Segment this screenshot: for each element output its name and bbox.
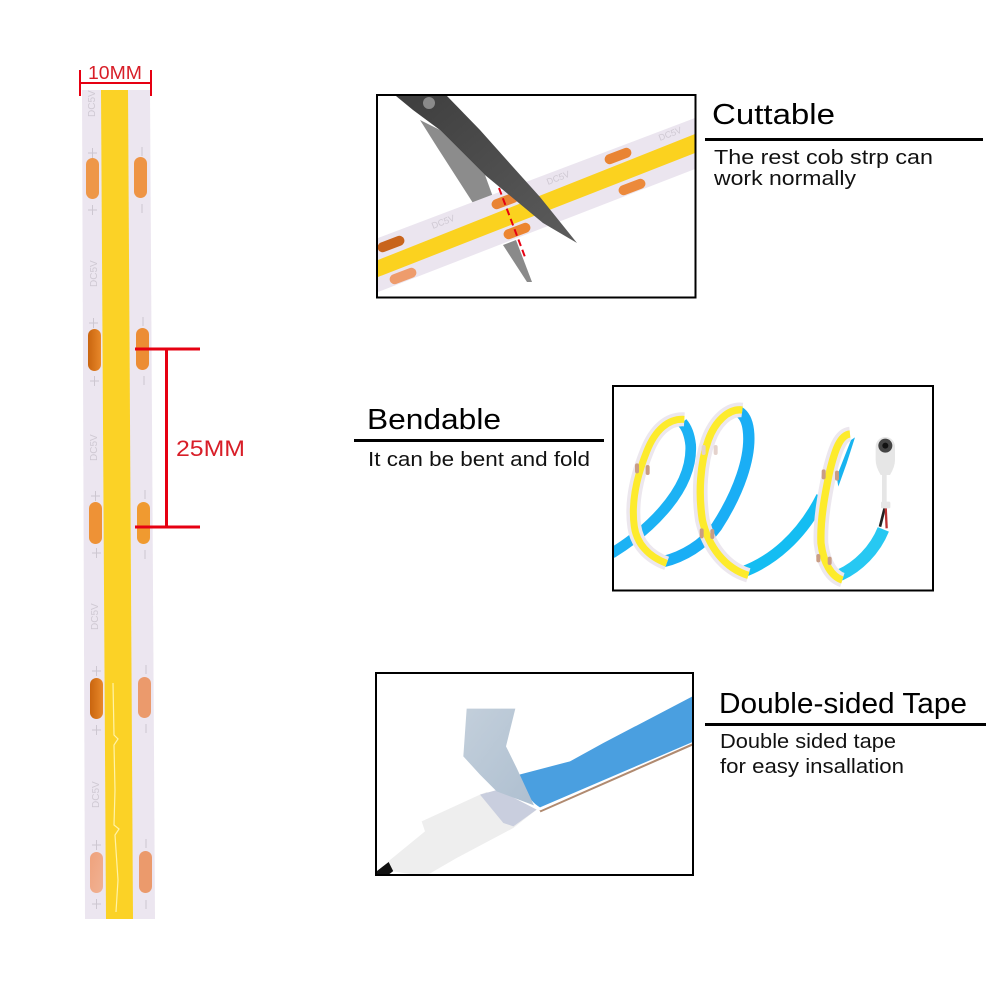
wires	[880, 507, 887, 528]
text: cuttable description	[713, 146, 933, 190]
text: tape description: for easy insallation	[720, 755, 904, 778]
polarity marks	[88, 147, 146, 909]
strip edge	[540, 744, 693, 811]
LED strip photo (vertical)	[82, 90, 155, 919]
scissor tip	[503, 240, 532, 282]
cut line	[499, 188, 525, 257]
solder pads	[86, 157, 152, 893]
strip	[378, 118, 695, 292]
heading: Bendable: Bendable	[367, 404, 501, 436]
DC5V print: DC5V	[430, 213, 456, 231]
screw	[423, 97, 435, 109]
heading: Cuttable	[705, 99, 983, 141]
text: cuttable description: work normally	[713, 167, 857, 190]
peeled liner	[463, 709, 534, 805]
heading: Bendable	[354, 404, 604, 442]
DC5V print: DC5V	[657, 125, 683, 143]
blue tape	[519, 696, 693, 807]
frame	[376, 673, 693, 875]
dimension: 25MM	[135, 349, 245, 527]
text: tape description	[720, 730, 904, 778]
frame	[613, 386, 933, 590]
DC5V print	[430, 125, 683, 231]
heat-shrink sleeve	[388, 792, 537, 876]
DC5V print: DC5V	[545, 169, 571, 187]
pads	[376, 146, 647, 286]
connector	[876, 437, 895, 508]
blue backing	[612, 412, 883, 575]
DC5V print: DC5V	[91, 781, 102, 808]
yellow COB line	[378, 134, 695, 277]
DC5V print: DC5V	[89, 434, 100, 461]
crack highlight in phosphor	[113, 683, 119, 912]
heading: Cuttable: Cuttable	[712, 99, 835, 131]
panel: cuttable photo	[376, 95, 696, 298]
text: tape description: Double sided tape	[720, 730, 896, 753]
dimension: 10MM	[80, 63, 151, 96]
upper scissor blade	[396, 96, 577, 243]
loop two	[700, 410, 748, 575]
dimension: 10MM: 10MM	[88, 63, 142, 83]
DC5V print	[87, 90, 102, 808]
panel: bendable photo	[612, 386, 933, 590]
strip board	[82, 90, 155, 919]
text: cuttable description: The rest cob strp can	[714, 146, 933, 169]
text: bendable description: It can be bent and fold	[368, 449, 590, 471]
black cable	[378, 865, 393, 876]
heading: Double-sided Tape: Double-sided Tape	[719, 688, 967, 720]
loop one	[633, 419, 684, 563]
pads	[635, 445, 839, 565]
lower scissor blade	[420, 120, 493, 203]
DC5V print: DC5V	[87, 90, 98, 117]
DC5V print: DC5V	[90, 603, 101, 630]
frame	[377, 95, 696, 298]
panel: double-sided tape photo	[376, 673, 693, 876]
dimension: 25MM: 25MM	[176, 436, 245, 461]
yellow COB line	[101, 90, 133, 919]
DC5V print: DC5V	[89, 260, 100, 287]
loop three	[821, 434, 850, 580]
